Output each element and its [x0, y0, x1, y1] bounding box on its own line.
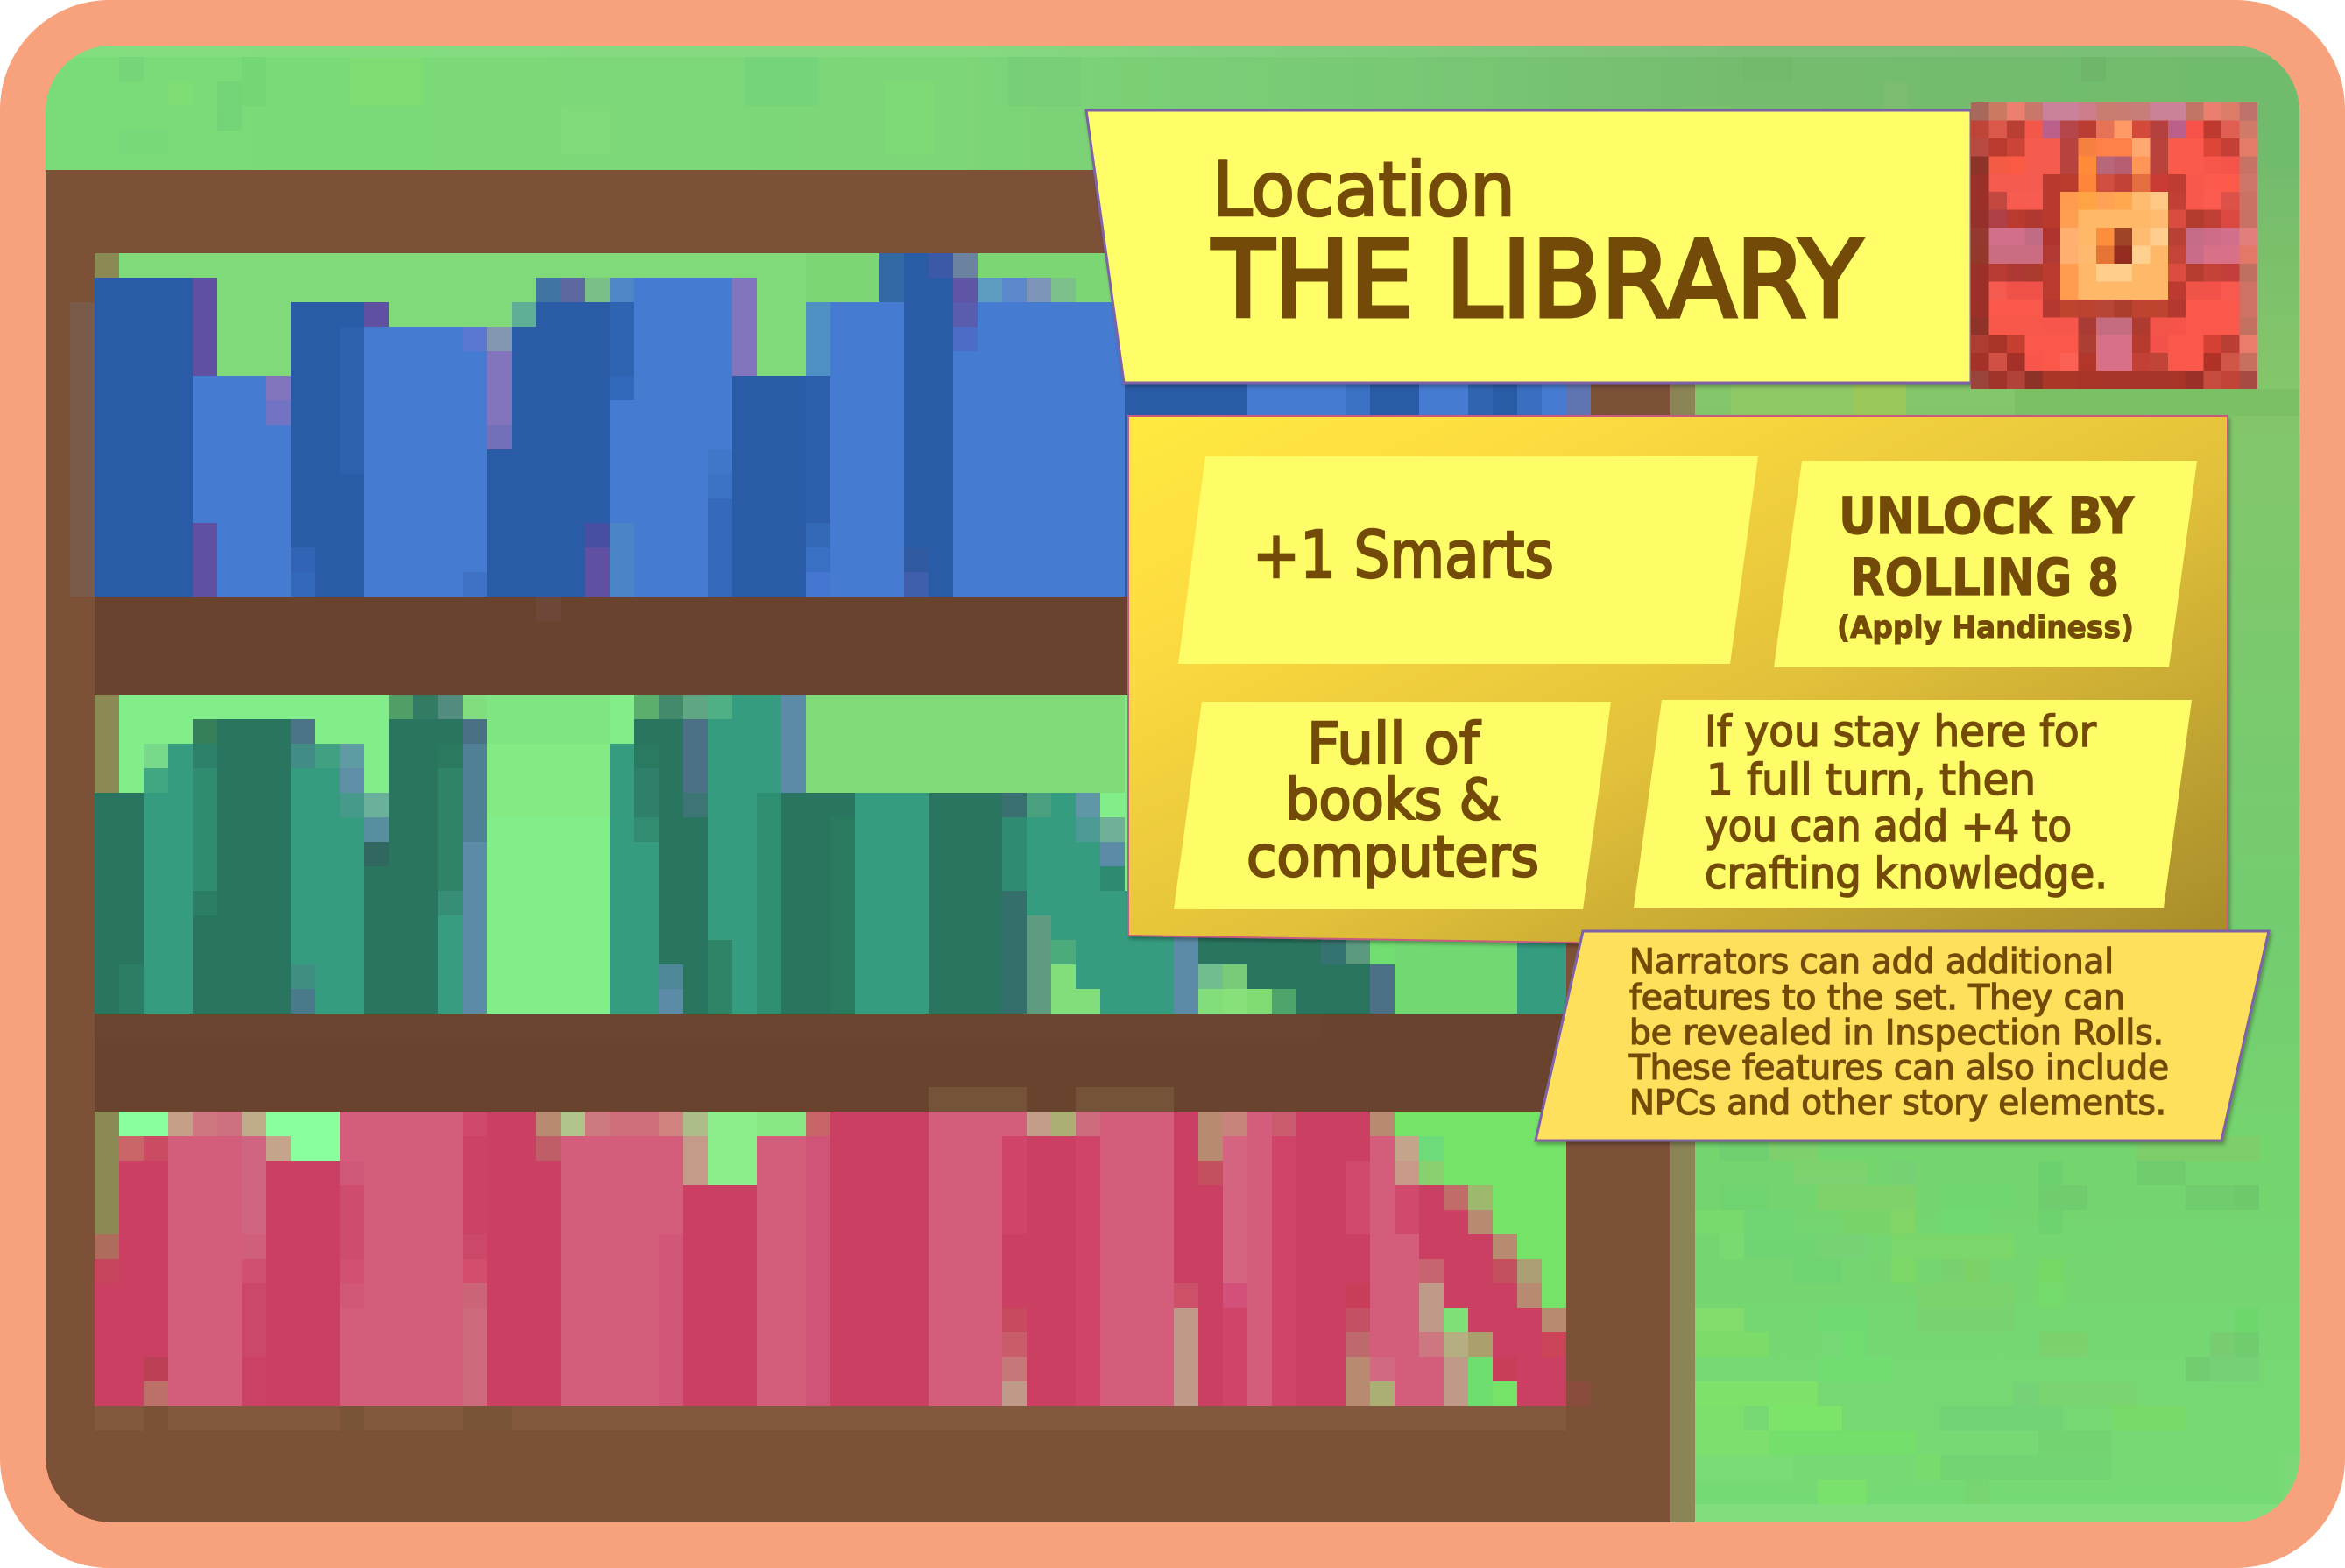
stat box: smarts bonus: [1178, 456, 1758, 664]
panel: location stats: [1128, 416, 2228, 953]
callout: narrator note: NPCs and other story elements.: [1629, 1084, 2166, 1123]
title banner: [1086, 110, 1971, 383]
shelf: green books: [95, 695, 1566, 1014]
stat box: stay effect: [1634, 700, 2192, 908]
callout: narrator note: [1536, 931, 2269, 1141]
stat box: stay effect: crafting knowledge.: [1705, 849, 2108, 899]
stat box: stay effect: you can add +4 to: [1705, 802, 2072, 851]
shelf: red books: [95, 1112, 1566, 1406]
stat box: unlock requirement: ROLLING 8: [1850, 547, 2119, 607]
stat box: unlock requirement: UNLOCK BY: [1839, 486, 2135, 546]
stat box: stay effect: 1 full turn, then: [1706, 755, 2036, 805]
callout: narrator note: features to the set. They can: [1629, 978, 2125, 1018]
stat box: description: Full of: [1307, 712, 1481, 777]
callout: narrator note: Narrators can add additional: [1629, 943, 2114, 982]
stat box: stay effect: If you stay here for: [1705, 707, 2097, 757]
icon: padlock tile: [1971, 102, 2257, 389]
stat box: smarts bonus: +1 Smarts: [1253, 518, 1554, 593]
shelf: blue books: [95, 253, 1591, 597]
bookshelf frame: [46, 170, 1695, 1522]
callout: narrator note: be revealed in Inspection Rolls.: [1629, 1014, 2164, 1053]
stat box: unlock requirement: [1774, 461, 2197, 667]
callout: narrator note: These features can also include: [1628, 1049, 2169, 1088]
stat box: description: books &: [1285, 768, 1501, 833]
heading: The Library: THE LIBRARY: [1211, 220, 1862, 342]
label: Location: Location: [1212, 146, 1515, 234]
grass: right field: [1695, 170, 2299, 1522]
stat box: unlock requirement: (Apply Handiness): [1837, 611, 2134, 646]
stat box: description: computers: [1247, 825, 1539, 890]
stat box: description: [1174, 702, 1611, 909]
grass: top strip: [46, 46, 2299, 170]
